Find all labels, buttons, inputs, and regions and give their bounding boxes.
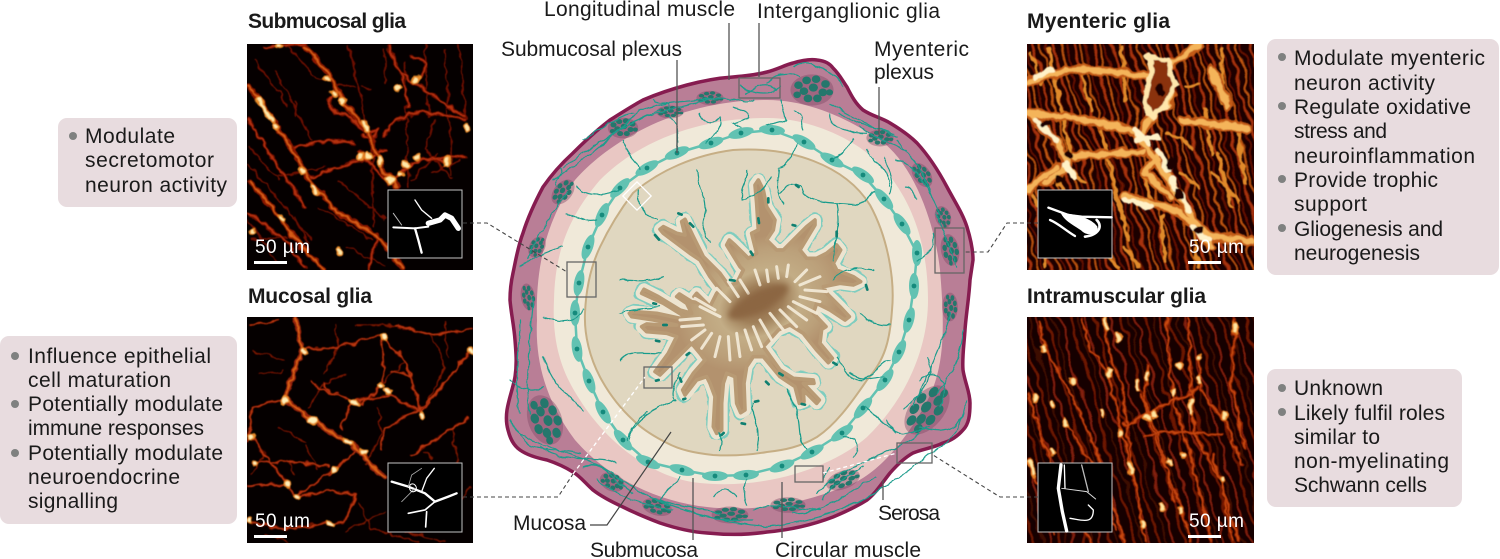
heading: intramuscular glia: Intramuscular glia — [1027, 285, 1206, 308]
diagram: gut cross-section — [506, 60, 973, 534]
heading: mucosal glia: Mucosal glia — [248, 285, 372, 308]
callout: myenteric glia functions: stress and — [1294, 120, 1387, 143]
callout: myenteric glia functions: Modulate myenteric — [1294, 47, 1485, 70]
callout: mucosal glia functions: immune responses — [28, 417, 204, 440]
circular muscle layer — [537, 100, 943, 509]
label: submucosa — [590, 478, 698, 559]
scale bar — [254, 240, 309, 264]
label: interganglionic glia: Interganglionic glia — [757, 0, 940, 23]
lumen glial fibres — [620, 170, 890, 450]
dashed connector: mucosal glia inside section — [573, 377, 645, 474]
callout: intramuscular glia functions: similar to — [1294, 426, 1380, 449]
scale bar — [1188, 514, 1243, 538]
label: submucosal plexus: Submucosal plexus — [501, 38, 682, 61]
callout: myenteric glia functions: neuroinflammation — [1294, 145, 1475, 168]
scale bar — [254, 514, 309, 538]
lumen glial cell bodies — [653, 185, 867, 435]
callout: mucosal glia functions: Influence epithelial — [28, 345, 211, 368]
scale bar: 50 µm — [1189, 511, 1244, 532]
label: serosa — [878, 480, 940, 525]
glial cell boxes — [567, 78, 964, 482]
inset: mucosal glial cell — [388, 463, 462, 532]
callout: intramuscular glia functions: Schwann cells — [1294, 474, 1427, 497]
micrograph: submucosal glia — [247, 43, 473, 270]
label: mucosa — [513, 432, 671, 535]
inset: submucosal glial cell — [388, 190, 462, 258]
label: myenteric plexus: Myenteric — [874, 38, 969, 61]
callout: intramuscular glia functions: Likely fulfil roles — [1294, 402, 1445, 425]
dashed connector: myenteric glia — [965, 223, 1038, 252]
callout: myenteric glia functions — [1267, 39, 1499, 275]
callout: myenteric glia functions: neuron activity — [1294, 72, 1436, 95]
nerve fibres, lower half — [510, 300, 967, 527]
submucosa layer — [554, 118, 928, 484]
callout: submucosal glia functions — [58, 118, 237, 207]
callout: mucosal glia functions: cell maturation — [28, 369, 171, 392]
inset: intramuscular glial cell — [1038, 463, 1112, 532]
callout: submucosal glia functions: secretomotor — [85, 149, 214, 172]
callout: intramuscular glia functions: Unknown — [1294, 377, 1383, 400]
heading: myenteric glia: Myenteric glia — [1027, 10, 1170, 33]
submucosal plexus — [570, 124, 922, 481]
dashed connector: submucosal glia — [463, 223, 567, 272]
callout: myenteric glia functions: Gliogenesis and — [1294, 218, 1443, 241]
inset: myenteric glial cell — [1038, 190, 1112, 258]
callout: submucosal glia functions: Modulate — [85, 125, 175, 148]
nerve fibres, upper half — [520, 63, 957, 267]
dashed connector: intramuscular glia inside section — [823, 453, 897, 473]
callout: myenteric glia functions: Regulate oxidative — [1294, 96, 1471, 119]
callout: myenteric glia functions: support — [1294, 193, 1367, 216]
callout: mucosal glia functions — [0, 336, 237, 524]
mucosa layer — [585, 149, 893, 455]
callout: mucosal glia functions: neuroendocrine — [28, 466, 180, 489]
micrograph: myenteric glia — [1027, 44, 1254, 270]
label: serosa: Serosa — [878, 502, 940, 525]
dashed connector: mucosal glia — [463, 474, 573, 497]
micrograph: intramuscular glia — [1027, 317, 1254, 543]
myenteric plexus ganglia — [519, 74, 962, 523]
callout: mucosal glia functions: signalling — [28, 490, 118, 513]
dashed connector: intramuscular glia — [933, 455, 1038, 497]
heading: submucosal glia: Submucosal glia — [248, 10, 406, 33]
callout: intramuscular glia functions — [1267, 369, 1462, 507]
callout: submucosal glia functions: neuron activity — [85, 174, 228, 197]
callout: intramuscular glia functions: non-myelinating — [1294, 450, 1449, 473]
callout: mucosal glia functions: Potentially modulate — [28, 393, 223, 416]
scale bar: 50 µm — [1189, 237, 1244, 258]
label: myenteric plexus — [874, 38, 969, 135]
scale bar: 50 µm — [255, 511, 310, 532]
label: mucosa: Mucosa — [513, 512, 586, 535]
serosa and longitudinal muscle layer — [506, 60, 973, 534]
callout: myenteric glia functions: Provide trophic — [1294, 169, 1438, 192]
callout: myenteric glia functions: neurogenesis — [1294, 242, 1420, 265]
scale bar — [1188, 240, 1243, 264]
callout: mucosal glia functions: Potentially modulate — [28, 442, 223, 465]
label: myenteric plexus: plexus — [874, 61, 934, 84]
scale bar: 50 µm — [255, 237, 310, 258]
lumen and folds — [620, 170, 890, 450]
micrograph: mucosal glia — [247, 317, 473, 543]
